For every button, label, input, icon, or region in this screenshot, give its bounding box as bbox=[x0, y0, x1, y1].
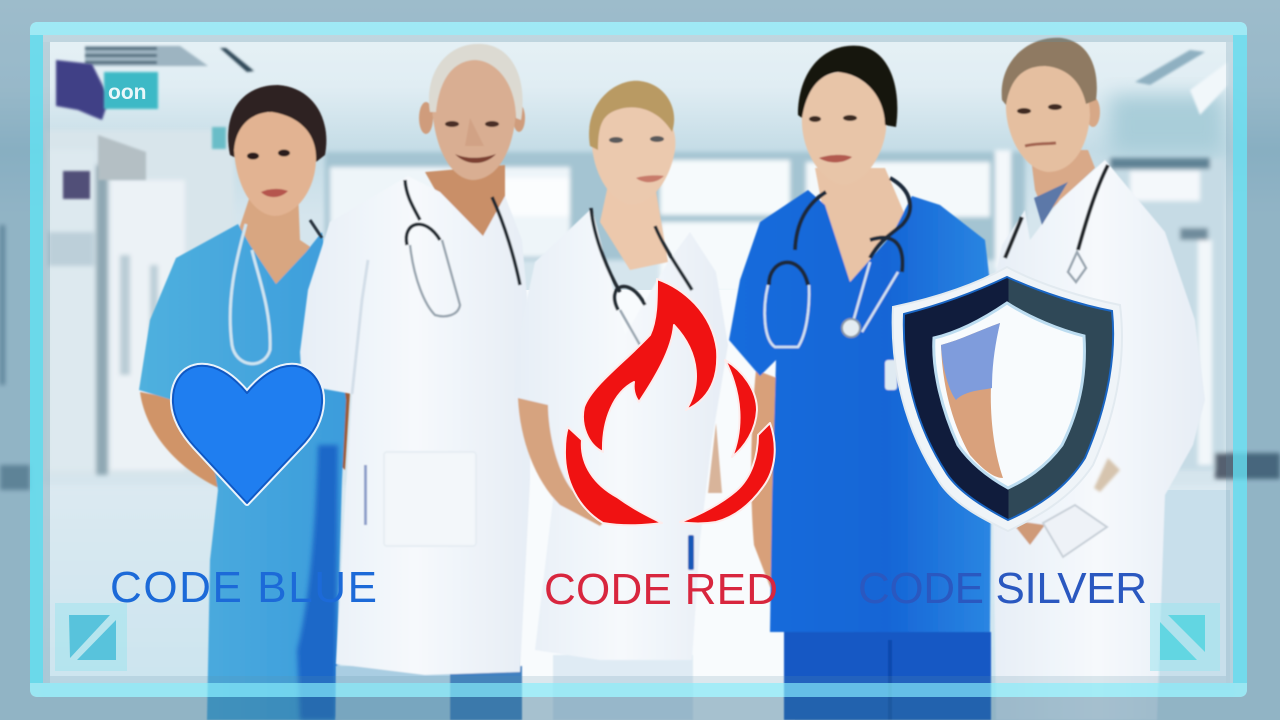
label: code blue: CODE BLUE bbox=[110, 563, 377, 612]
arm seen through shield bbox=[941, 323, 1003, 478]
icon: shield bbox=[893, 267, 1122, 531]
hair bbox=[429, 44, 523, 120]
stethoscope bbox=[795, 192, 826, 250]
skin at hand bbox=[1010, 520, 1045, 545]
hair bbox=[228, 85, 326, 162]
scrubs bbox=[729, 190, 992, 632]
face bbox=[1006, 64, 1090, 172]
coat pocket in hand bbox=[1043, 505, 1107, 557]
arm bbox=[140, 392, 292, 492]
label: code red: CODE RED bbox=[544, 565, 778, 614]
corner icon: bottom left bbox=[55, 603, 127, 671]
ears bbox=[419, 102, 433, 134]
neck bbox=[238, 190, 318, 290]
icon: red flame bbox=[565, 279, 775, 525]
label: code silver: CODE SILVER bbox=[858, 564, 1147, 613]
neck bbox=[815, 168, 905, 285]
ceiling vent bbox=[85, 46, 1228, 115]
corner icon: bottom right bbox=[1150, 603, 1220, 671]
scrubs top and trousers bbox=[139, 224, 346, 720]
person: nurse in light blue scrubs bbox=[139, 85, 350, 720]
person: male doctor on right bbox=[990, 38, 1205, 720]
bright floor in the centre bbox=[520, 290, 795, 720]
room sign: oon bbox=[108, 81, 146, 104]
coat pocket bbox=[384, 452, 476, 546]
icon: blue heart bbox=[173, 366, 322, 503]
face bbox=[432, 54, 516, 180]
face bbox=[592, 102, 675, 205]
ear bbox=[1086, 97, 1100, 127]
arms bbox=[518, 398, 610, 526]
room sign bbox=[56, 60, 158, 120]
stethoscope bbox=[230, 224, 270, 364]
person: nurse in dark blue scrubs bbox=[729, 46, 992, 720]
person: blonde female doctor bbox=[514, 81, 728, 720]
face bbox=[802, 72, 886, 185]
hair bbox=[1002, 38, 1097, 105]
arms bbox=[751, 370, 798, 630]
hair bbox=[798, 46, 897, 127]
stethoscope bbox=[591, 208, 620, 292]
person: older male doctor bbox=[300, 44, 530, 720]
stethoscope bbox=[1005, 165, 1108, 258]
face bbox=[234, 112, 316, 216]
hair bbox=[589, 81, 674, 150]
stethoscope bbox=[405, 180, 440, 245]
